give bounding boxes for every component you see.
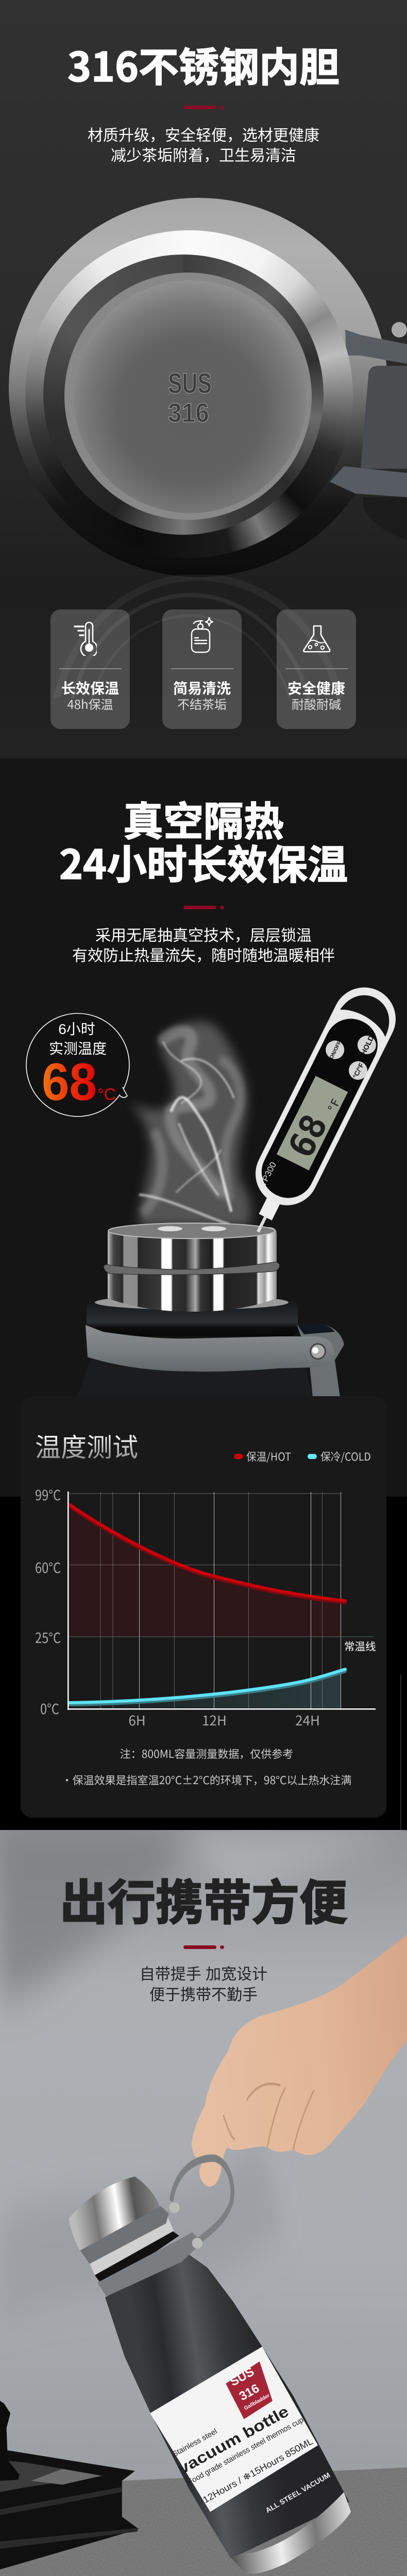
panel: easy to carry [0,1830,407,2576]
callout: measured temperature: 实测温度 [49,1041,107,1057]
description text [88,127,319,164]
thermometer: 68 [281,1108,336,1164]
accent bar [183,906,224,909]
bottle: handle loop [169,2158,232,2248]
bottle label text: Food grade stainless steel thermos cup [186,2415,305,2486]
description text: 自带提手 加宽设计 [140,1966,267,1983]
bottle label text: Gallbladder [243,2393,271,2412]
icon: bottle top view: SUS [168,367,212,399]
x axis labels: 24H [295,1710,320,1730]
thermometer: °C/°F [351,1062,365,1079]
thermometer: ON/OFF [329,1040,343,1060]
legend [234,1449,371,1464]
bottle: label [150,2347,318,2512]
hand [192,1935,407,2187]
icon: bottle top view [9,198,407,577]
description text: 材质升级，安全轻便，选材更健康 [88,127,319,144]
y axis labels: 60°C [35,1557,61,1577]
thermometer: TP300 [258,1160,278,1188]
thermometer: HOLD [359,1034,376,1056]
bottle: base ring [230,2492,351,2574]
line chart [67,1492,376,1710]
card: safe and healthy [277,609,356,729]
thermometer [230,977,406,1246]
sublabel: 48h保温 [67,694,113,713]
description text: 便于携带不勤手 [149,1987,258,2004]
panel: vacuum insulation [0,758,407,1830]
bottle label text [171,2365,331,2515]
icon: soap bottle [191,617,213,653]
heading: vacuum insulation, 24 hours: 真空隔热 [123,790,284,848]
thermometer: °F [326,1097,343,1115]
divider [285,668,348,669]
card: long-lasting insulation [50,609,130,729]
sublabel: 耐酸耐碱 [292,694,341,713]
label: 长效保温 [61,677,119,698]
divider [171,668,233,669]
card: easy to clean [162,609,242,729]
icon: flask [303,625,331,652]
bottle: cap and neck [69,2177,202,2296]
legend: 保温/HOT [246,1449,291,1464]
x axis labels: 12H [202,1710,227,1730]
countertop [0,2467,407,2576]
chess board and king [0,2401,139,2569]
callout: measured temperature: 68 [42,1053,97,1111]
handle arm upper [345,330,407,364]
bottle reflection [54,574,343,698]
y axis labels [35,1484,61,1718]
label: 安全健康 [287,677,345,698]
legend: 保冷/COLD [320,1449,371,1464]
bottle: chrome lid and neck [87,1223,298,1336]
description text: 减少茶垢附着，卫生易清洁 [111,147,296,164]
x axis labels [128,1710,320,1730]
heading: vacuum insulation, 24 hours [59,790,348,891]
accent bar [183,1945,224,1949]
black lower background [0,1497,407,1830]
chart title: 温度测试 [35,1427,138,1464]
steam [130,1022,251,1226]
x axis labels: 6H [128,1710,146,1730]
y axis labels: 99°C [35,1484,61,1504]
callout: measured temperature [26,1013,129,1116]
y axis labels: 25°C [35,1627,61,1647]
panel: 316 stainless steel liner [0,0,407,758]
heading: 316不锈钢内胆: 316不锈钢内胆 [67,36,340,93]
description text [140,1966,267,2004]
bottle label text: Stainless steel [171,2427,219,2459]
bottle label text: vacuum bottle [175,2403,292,2478]
room temperature label: 常温线 [344,1638,376,1653]
bottle: body [105,2253,349,2558]
bottle: shoulder [77,1358,312,1397]
icon: bottle top view: 316 [168,398,209,428]
label: 简易清洗 [173,677,231,698]
panel: temperature test chart [21,1396,386,1818]
accent bar [183,106,224,109]
description text [72,927,335,964]
sublabel: 不结茶垢 [177,694,227,713]
bottle label text: ALL STEEL VACUUM [264,2471,331,2515]
notes: 注：800ML容量测量数据，仅供参考 [120,1746,293,1761]
y axis labels: 0°C [40,1698,59,1718]
divider [59,668,122,669]
heading: easy to carry: 出行携带方便 [60,1864,347,1934]
bottle label text: 12Hours / ❄15Hours 850ML [201,2436,315,2505]
background shading [0,1829,407,2322]
description text: 有效防止热量流失，随时随地温暖相伴 [72,947,335,964]
callout: measured temperature: °C [97,1085,116,1104]
bottle: handle band [86,1324,344,1397]
description text: 采用无尾抽真空技术，层层锁温 [95,927,312,944]
heading: vacuum insulation, 24 hours: 24小时长效保温 [59,833,348,891]
notes [62,1746,351,1788]
icon: thermometer [74,621,97,656]
notes: ·保温效果是指室温20°C±2°C的环境下，98°C以上热水注满 [62,1772,351,1788]
handle block [361,366,407,469]
bottle label text: SUS [228,2365,257,2389]
callout: measured temperature: 6小时 [58,1021,95,1037]
bottle label text: 316 [237,2381,262,2403]
